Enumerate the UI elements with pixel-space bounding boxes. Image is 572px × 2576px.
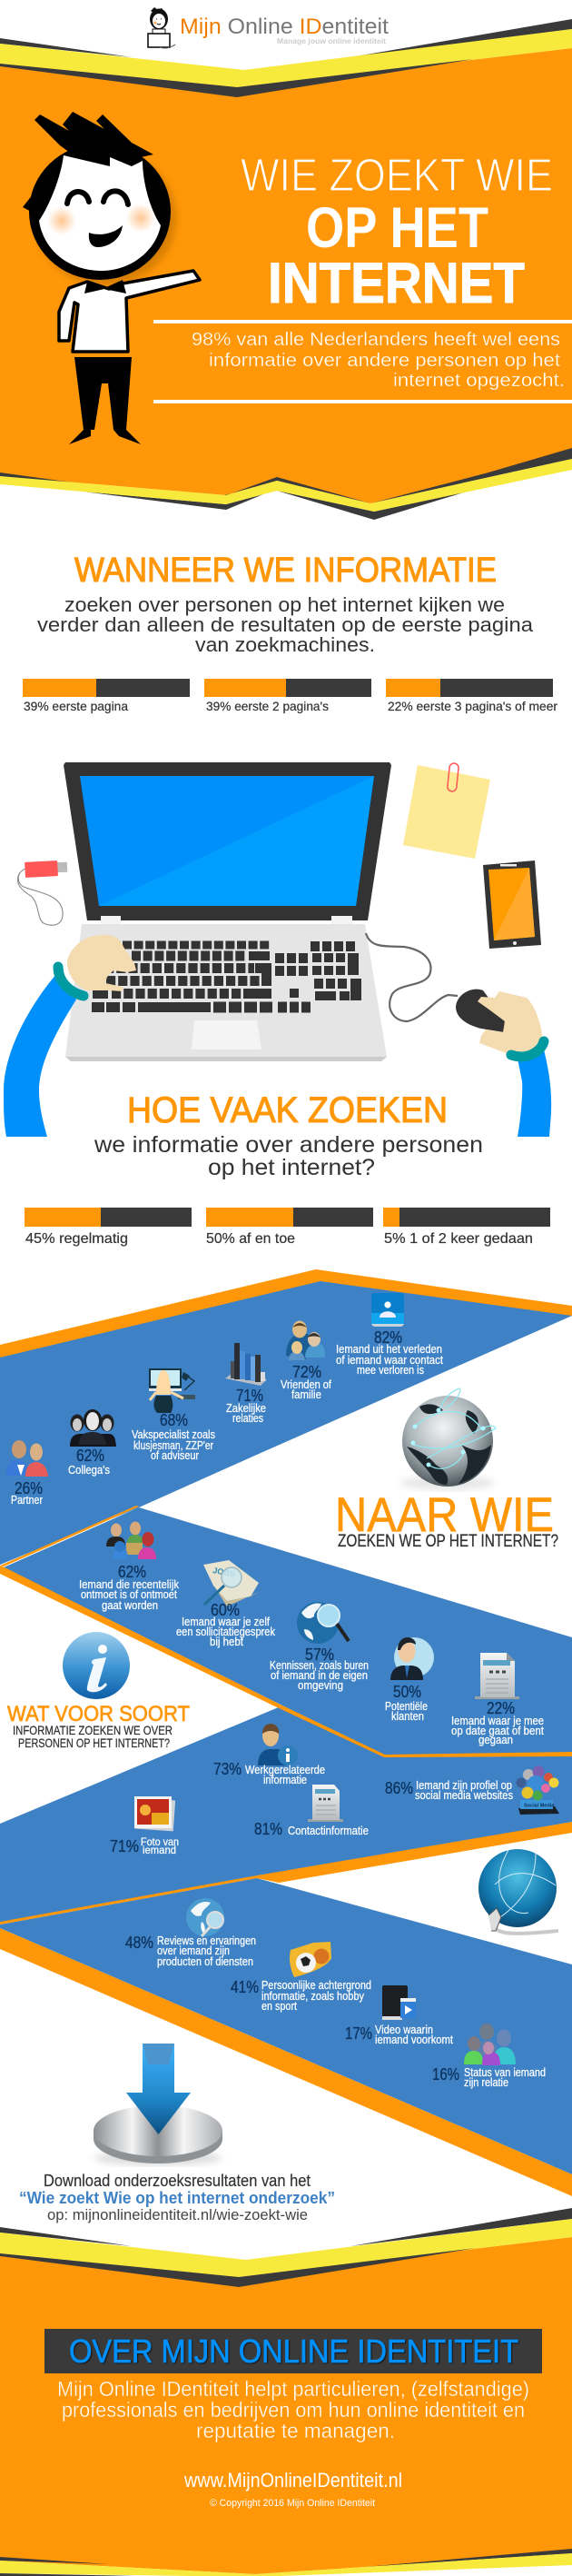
icon: blue network sphere with cable: [478, 1849, 558, 1934]
stat: 48% reviews: [125, 1898, 256, 1968]
icon: contact document: [308, 1785, 343, 1822]
footer about text: professionals en bedrijven om hun online identiteit en: [62, 2398, 525, 2422]
icon: meeting people: [106, 1521, 156, 1559]
stat: 60% job interview: [176, 1560, 276, 1648]
icon: family: [286, 1321, 325, 1360]
stat: 16% relationship status: Status van iemand: [464, 2066, 546, 2079]
stat: 50% potential clients: klanten: [391, 1710, 424, 1723]
bar chart: 5% 1 of 2 keer gedaan: 5% 1 of 2 keer gedaan: [384, 1231, 533, 1247]
icon: photo print: [134, 1796, 175, 1831]
stat: 50% potential clients: Potentiële: [385, 1700, 428, 1713]
icon: bar chart: [225, 1343, 267, 1386]
stat: 57% acquaintances: omgeving: [298, 1679, 343, 1692]
stat: 57% acquaintances: [270, 1602, 369, 1692]
stat: 82% lost contact: of iemand waar contact: [336, 1354, 443, 1367]
stat: 71% business relations: Zakelijke: [226, 1402, 266, 1415]
stat: 17% video: 17%: [345, 2024, 372, 2043]
footer about text: [57, 2377, 529, 2442]
bar chart: 39% eerste pagina: 39% eerste pagina: [24, 699, 128, 713]
stat: 41% personal background: 41%: [231, 1978, 259, 1996]
icon: social media cloud: Social Media: [524, 1803, 555, 1808]
footer about text: Mijn Online IDentiteit helpt particulieren, (zelfstandige): [57, 2377, 529, 2401]
footer copyright: © Copyright 2016 Mijn Online IDentiteit: [210, 2498, 375, 2509]
stat: 62% recently met: [79, 1521, 180, 1612]
stat: 71% business relations: [225, 1343, 267, 1425]
face: [39, 155, 161, 271]
panel: naar wie blue shape: [0, 1269, 572, 1566]
logo tagline: Manage jouw online identiteit: [277, 36, 386, 45]
stat: 26% partner: [6, 1440, 48, 1507]
icon: partner couple: [6, 1440, 48, 1477]
illustration: usb stick: [18, 860, 67, 925]
stat: 22% dating: 22%: [487, 1699, 515, 1717]
bar chart: 5% 1 of 2 keer gedaan: [383, 1208, 550, 1247]
illustration: left arm and hand typing: [4, 935, 136, 1137]
trousers: [74, 357, 132, 430]
stat: 16% relationship status: zijn relatie: [464, 2076, 508, 2089]
download text: “Wie zoekt Wie op het internet onderzoek”: [19, 2189, 335, 2207]
bar chart: 45% regelmatig: [25, 1208, 192, 1247]
icon: contact card: [371, 1293, 404, 1327]
bar chart: 22% eerste 3 pagina's of meer: [386, 679, 557, 713]
stat: 68% specialist: 68%: [160, 1411, 188, 1429]
stat: 22% dating: Iemand waar je mee: [451, 1715, 544, 1727]
stat: 82% lost contact: mee verloren is: [357, 1364, 424, 1377]
stat: 81% contact info: 81%: [254, 1820, 282, 1838]
panel: lower blue shape: [0, 1878, 572, 2174]
text: hoe vaak intro: we informatie over andere personen: [94, 1132, 483, 1158]
orange diagonal bands: [0, 1566, 572, 2196]
footer website: www.MijnOnlineIDentiteit.nl: [183, 2469, 402, 2491]
download text: op: mijnonlineidentiteit.nl/wie-zoekt-wie: [47, 2206, 308, 2223]
text: wanneer intro: zoeken over personen op het internet kijken we: [64, 593, 505, 616]
logo: [148, 7, 389, 48]
stat: 17% video: [345, 1985, 453, 2046]
icon: earth with magnifier: [186, 1898, 224, 1936]
text: hoe vaak intro: op het internet?: [208, 1155, 375, 1180]
stat: 41% personal background: Persoonlijke achtergrond: [261, 1979, 371, 1992]
stat: 82% lost contact: Iemand uit het verleden: [336, 1343, 442, 1356]
stat: 17% video: Video waarin: [375, 2024, 433, 2036]
heading: wat voor soort: WAT VOOR SOORT: [7, 1702, 190, 1726]
text: wanneer intro: van zoekmachines.: [195, 633, 375, 656]
stat: 26% partner: Partner: [11, 1494, 43, 1507]
stat: 86% social media: social media websites: [415, 1789, 513, 1802]
icon: businessman with globe: [390, 1637, 434, 1680]
stat: 82% lost contact: 82%: [374, 1328, 402, 1347]
stat: 16% relationship status: 16%: [432, 2065, 459, 2084]
bar chart: 39% eerste 2 pagina's: 39% eerste 2 pagina's: [206, 699, 329, 713]
laptop base: [65, 1057, 387, 1061]
stat: 71% photo: 71%: [110, 1837, 139, 1855]
hero statistic text: 98% van alle Nederlanders heeft wel eens: [192, 330, 560, 350]
stat: 60% job interview: Iemand waar je zelf: [182, 1616, 270, 1628]
stat: 57% acquaintances: Kennissen, zoals buren: [270, 1659, 369, 1672]
illustration: laptop: [64, 762, 391, 1061]
illustration: sticky note with paperclip: [403, 763, 490, 859]
stat: 82% lost contact: [336, 1293, 443, 1377]
stat: 16% relationship status: [432, 2024, 546, 2089]
stat: 71% photo: [110, 1796, 179, 1856]
heading: wat voor soort: PERSONEN OP HET INTERNET?: [18, 1736, 170, 1750]
head: [29, 144, 171, 280]
icon: document: [475, 1653, 519, 1699]
stat: 22% dating: gegaan: [478, 1734, 513, 1746]
stat: 81% contact info: Contactinformatie: [288, 1825, 369, 1837]
bar chart: 39% eerste pagina: [23, 679, 190, 713]
heading: wat voor soort: INFORMATIE ZOEKEN WE OVER: [13, 1723, 173, 1737]
download text: Download onderzoeksresultaten van het: [44, 2172, 311, 2190]
panel: hero orange background: [0, 48, 572, 503]
footer bottom band: [0, 2549, 572, 2576]
stat: 62% recently met: 62%: [118, 1563, 146, 1581]
stat: 22% dating: op date gaat of bent: [451, 1725, 544, 1737]
stat: 62% colleagues: Collega's: [68, 1464, 110, 1477]
bar chart: 50% af en toe: 50% af en toe: [206, 1231, 295, 1247]
shirt and arms: [59, 271, 200, 352]
logo wordmark: Mijn Online IDentiteit: [180, 15, 389, 39]
stat: 62% colleagues: 62%: [76, 1447, 104, 1465]
stat: 73% work info: 73%: [213, 1760, 242, 1778]
title: [241, 149, 553, 315]
panel: wat voor soort blue shape: [0, 1706, 572, 1923]
stat: 41% personal background: en sport: [261, 2000, 297, 2013]
icon: man with info badge: [258, 1724, 298, 1765]
stat: 62% recently met: gaat worden: [102, 1599, 158, 1612]
illustration: cartoon character pointing: [23, 112, 200, 444]
stat: 57% acquaintances: of iemand in de eigen: [271, 1669, 368, 1682]
stat: 71% photo: iemand: [143, 1844, 176, 1856]
stat: 50% potential clients: [385, 1637, 434, 1723]
stat: 62% recently met: Iemand die recentelijk: [79, 1578, 180, 1591]
keyboard: [104, 945, 356, 1007]
stat: 17% video: iemand voorkomt: [375, 2034, 453, 2046]
bar chart: 45% regelmatig: 45% regelmatig: [25, 1231, 128, 1247]
logo icon: mini character at laptop: [148, 7, 175, 48]
download text: [19, 2172, 335, 2223]
title: OP HET: [306, 196, 488, 260]
hero top chevron band: [0, 19, 572, 97]
stat: 26% partner: 26%: [15, 1479, 43, 1497]
panel: second naar wie blue shape: [4, 1507, 572, 1755]
stat: 60% job interview: bij hebt: [210, 1636, 243, 1648]
laptop lid: [64, 762, 391, 920]
heading: wat voor soort: [7, 1702, 190, 1750]
stat: 48% reviews: over iemand zijn: [157, 1944, 230, 1957]
icon: information sphere: [63, 1632, 130, 1699]
hero statistic text: internet opgezocht.: [393, 371, 565, 391]
stat: 71% business relations: 71%: [236, 1387, 263, 1405]
stat: 73% work info: [213, 1724, 325, 1786]
stat: 60% job interview: 60%: [211, 1601, 240, 1619]
hero bottom zigzag band: [0, 448, 572, 520]
bar chart: 39% eerste 2 pagina's: [204, 679, 371, 713]
stat: 62% recently met: ontmoet is of ontmoet: [81, 1588, 177, 1601]
stat: 68% specialist: of adviseur: [151, 1449, 199, 1462]
icon: newspaper jobs with magnifier: JOBS: [212, 1566, 236, 1578]
footer about text: reputatie te managen.: [196, 2419, 395, 2442]
stat: 81% contact info: [254, 1785, 369, 1838]
stat: 73% work info: Werkgerelateerde: [245, 1764, 325, 1776]
stat: 48% reviews: producten of diensten: [157, 1955, 253, 1968]
icon: download arrow on metal disc: [94, 2044, 222, 2165]
stat: 86% social media: 86%: [385, 1779, 413, 1797]
panel: footer orange background: [0, 2237, 572, 2574]
stat: 72% friends or family: familie: [291, 1388, 321, 1401]
stat: 68% specialist: klusjesman, ZZP'er: [133, 1439, 213, 1452]
stat: 60% job interview: een sollicitatiegesprek: [176, 1626, 276, 1638]
stat: 50% potential clients: 50%: [393, 1683, 421, 1701]
hero statistic text: [153, 320, 572, 403]
title: INTERNET: [268, 252, 525, 315]
stat: 72% friends or family: [281, 1321, 331, 1401]
icon: globe with magnifier: [297, 1602, 349, 1644]
text: hoe vaak intro: [94, 1132, 483, 1180]
stat: 62% colleagues: [68, 1409, 116, 1477]
hero statistic text: informatie over andere personen op het: [209, 351, 560, 371]
heading: wanneer we informatie: WANNEER WE INFORMATIE: [74, 552, 497, 590]
stat: 68% specialist: [132, 1368, 215, 1462]
stat: 48% reviews: 48%: [125, 1934, 153, 1952]
text: wanneer intro: verder dan alleen de resultaten op de eerste pagina: [37, 613, 534, 636]
stat: 57% acquaintances: 57%: [305, 1646, 334, 1664]
icon: silver network globe: [400, 1388, 496, 1490]
stat: 41% personal background: [231, 1942, 371, 2013]
illustration: smartphone: [483, 860, 541, 949]
icon: sports folder: [290, 1942, 331, 1977]
stat: 48% reviews: Reviews en ervaringen: [157, 1934, 256, 1947]
footer banner heading: OVER MIJN ONLINE IDENTITEIT: [69, 2332, 518, 2370]
icon: woman at desk: [149, 1368, 195, 1413]
icon: group of people: [464, 2024, 516, 2065]
illustration: mouse with cable and right hand: [366, 933, 551, 1137]
stat: 86% social media: Iemand zijn profiel op: [416, 1779, 512, 1792]
bar chart: 22% eerste 3 pagina's of meer: 22% eerste 3 pagina's of meer: [388, 699, 557, 713]
heading: naar wie: NAAR WIE: [335, 1488, 554, 1542]
bar chart: 50% af en toe: [206, 1208, 373, 1247]
text: wanneer intro: [37, 593, 534, 656]
icon: video clapper: [382, 1985, 416, 2020]
stat: 22% dating: [451, 1653, 544, 1746]
stat: 73% work info: informatie: [263, 1774, 307, 1786]
stat: 86% social media: [385, 1766, 559, 1815]
stat: 71% business relations: relaties: [232, 1412, 263, 1425]
heading: hoe vaak zoeken: HOE VAAK ZOEKEN: [127, 1090, 448, 1130]
stat: 41% personal background: informatie, zoals hobby: [261, 1990, 365, 2003]
footer top chevron band: [0, 2208, 572, 2287]
stat: 72% friends or family: 72%: [292, 1363, 321, 1381]
stat: 71% photo: Foto van: [141, 1835, 179, 1848]
stat: 68% specialist: Vakspecialist zoals: [132, 1428, 215, 1441]
hair: [35, 112, 153, 168]
icon: colleagues: [70, 1409, 116, 1447]
stat: 72% friends or family: Vrienden of: [281, 1378, 331, 1391]
icon: social media cloud: [516, 1766, 559, 1815]
